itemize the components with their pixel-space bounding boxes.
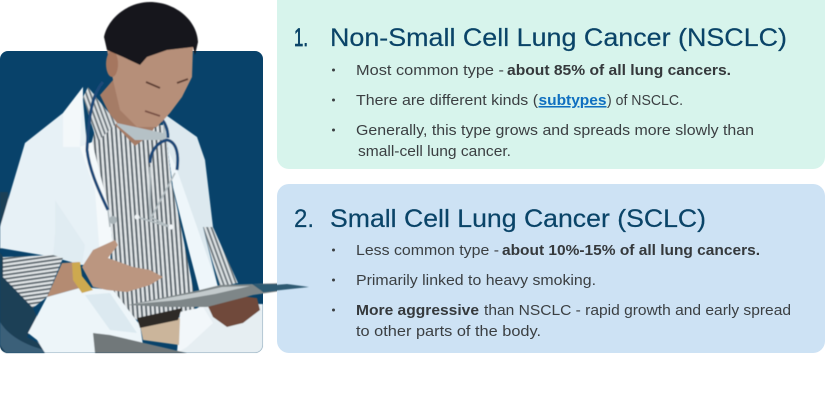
hair — [104, 2, 198, 65]
bullet list: NSCLC: about 85% of all lung cancers. — [507, 62, 731, 79]
lower coat flap — [177, 307, 213, 353]
bullet list: SCLC — [332, 242, 791, 340]
white trousers — [178, 304, 263, 353]
lap coat — [28, 287, 143, 353]
clipboard tip over panel — [263, 284, 309, 292]
photo: doctor reading a clipboard — [0, 2, 308, 353]
heading: SCLC: Small Cell Lung Cancer (SCLC) — [330, 205, 706, 233]
shirt — [88, 125, 195, 320]
left striped sleeve — [3, 255, 63, 308]
bullet list: NSCLC: Generally, this type grows and spreads more slowly than — [356, 122, 754, 139]
right coat — [163, 113, 218, 293]
chair — [0, 192, 43, 354]
bullet list: SCLC: More aggressive — [356, 302, 479, 319]
bullet list: NSCLC — [332, 62, 754, 160]
number 1: 1. — [294, 24, 308, 52]
laptop — [93, 333, 187, 353]
bullet list: SCLC: about 10%-15% of all lung cancers. — [502, 242, 760, 259]
watch — [72, 262, 93, 293]
panel: NSCLC — [277, 0, 825, 169]
panel: SCLC — [277, 184, 825, 353]
bullet list: NSCLC: ) of NSCLC. — [607, 92, 683, 109]
belt — [137, 308, 182, 328]
heading: NSCLC: Non-Small Cell Lung Cancer (NSCLC) — [330, 24, 787, 52]
bullet list: NSCLC: small-cell lung cancer. — [358, 143, 511, 160]
face — [106, 47, 193, 127]
open hand — [82, 240, 163, 292]
clipboard — [128, 283, 308, 307]
left coat — [0, 87, 112, 265]
bullet list: NSCLC: subtypes — [538, 92, 606, 109]
bullet list: SCLC: Less common type - — [356, 242, 499, 259]
panel: photo background — [0, 51, 263, 353]
bullet list: NSCLC: Most common type - — [356, 62, 504, 79]
bullet list: SCLC: Primarily linked to heavy smoking. — [356, 272, 596, 289]
number 2: 2. — [294, 205, 314, 233]
bullet list: SCLC: to other parts of the body. — [356, 323, 541, 340]
right striped sleeve — [203, 227, 238, 287]
stethoscope — [87, 82, 178, 230]
khaki trousers — [140, 318, 180, 345]
bullet list: NSCLC: There are different kinds ( — [356, 92, 538, 109]
collar — [83, 87, 168, 142]
neck — [100, 80, 156, 146]
forearm — [47, 262, 83, 297]
bullet list: SCLC: than NSCLC - rapid growth and early spread — [484, 302, 791, 319]
hand holding clipboard — [205, 295, 260, 327]
